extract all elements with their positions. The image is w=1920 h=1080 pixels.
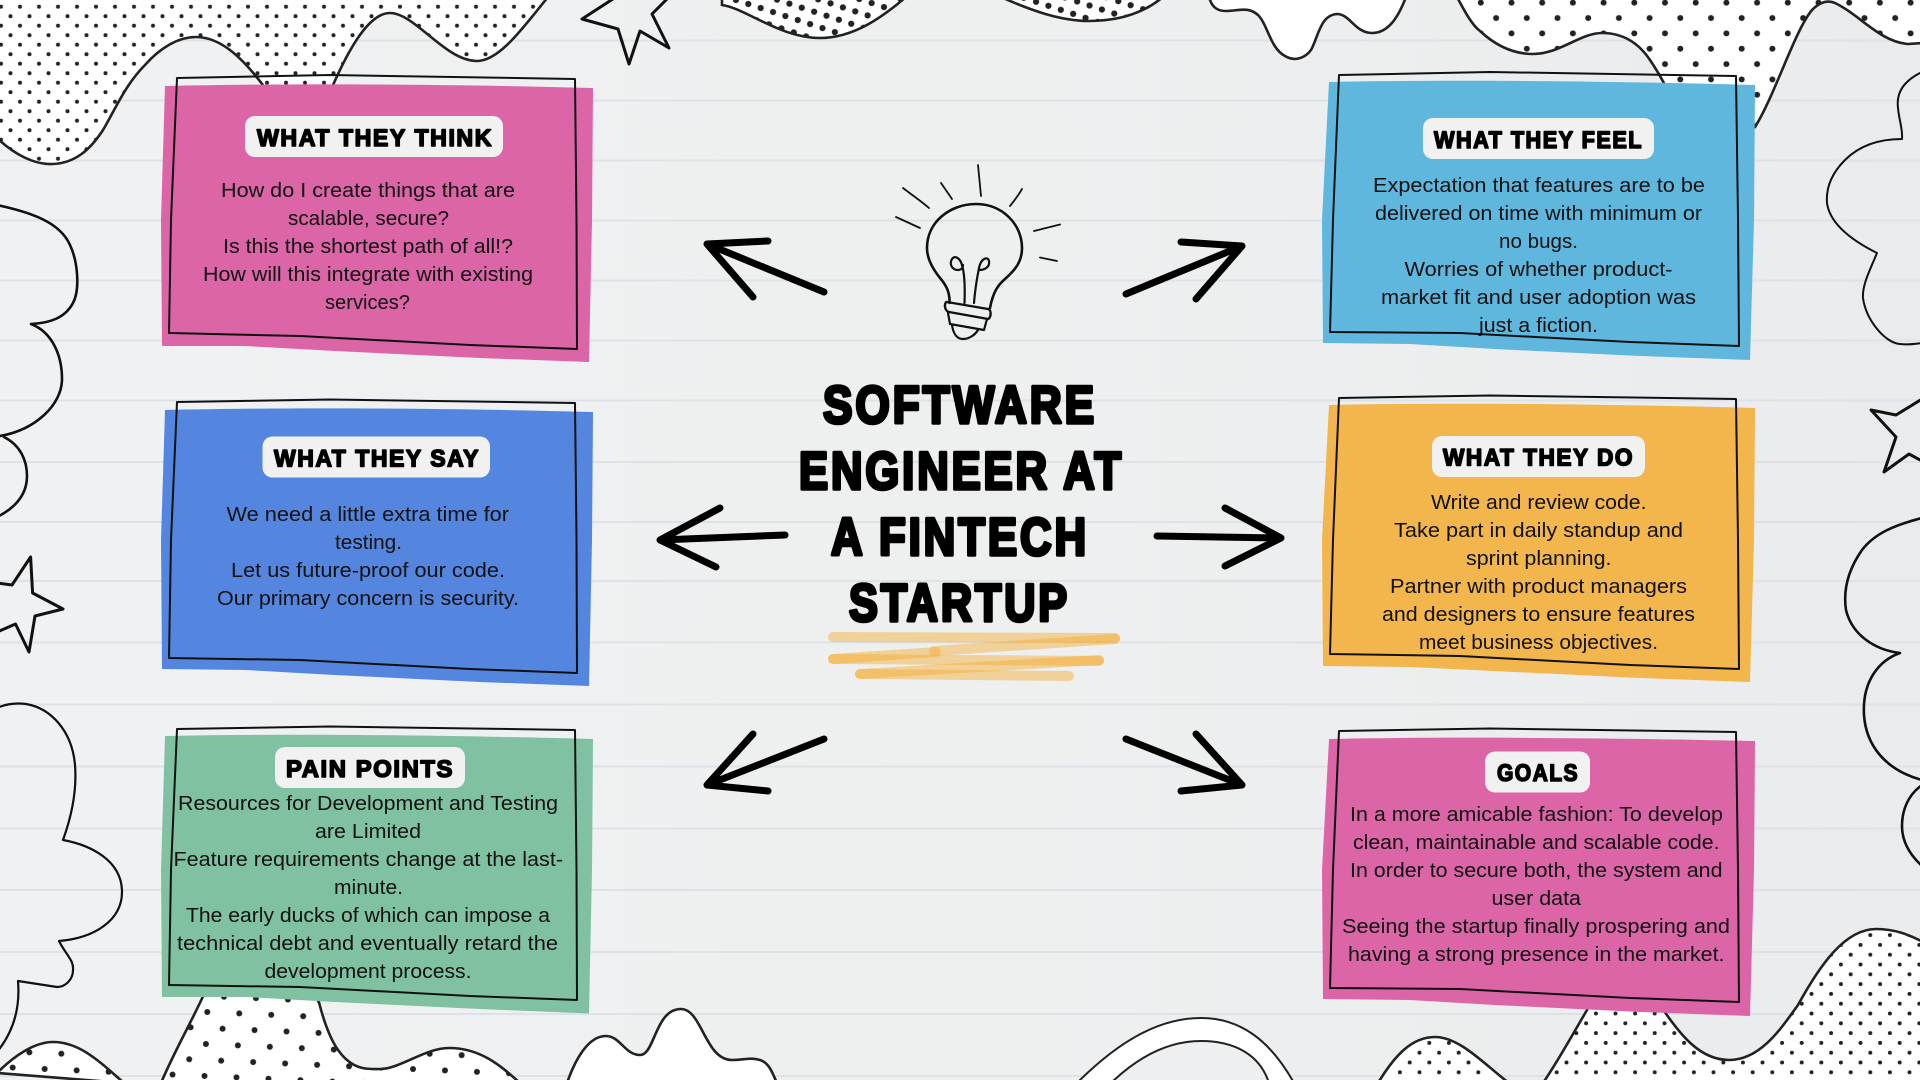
sketch frame [169,75,577,349]
sketch frame [169,400,577,673]
panel: what they do [1322,396,1755,682]
decoration: top middle dotted blob [722,0,906,38]
body text: clean, maintainable and scalable code. [1353,831,1720,854]
body text: In a more amicable fashion: To develop [1350,803,1723,826]
decoration: top white blob [1209,0,1406,59]
body text: having a strong presence in the market. [1348,943,1724,966]
sketch frame [1330,72,1739,346]
body text: Resources for Development and Testing [178,792,558,815]
arrow: to what they think [707,241,824,297]
panel: what they feel [1322,72,1755,360]
decoration: right star [1871,399,1920,472]
body text: Let us future-proof our code. [231,559,505,582]
title: A FINTECH [831,508,1089,567]
body text: and designers to ensure features [1382,603,1695,626]
decoration: bottom-left dotted blob [0,1042,124,1080]
decoration: bottom white blob [567,1009,777,1080]
title: SOFTWARE [823,376,1097,435]
heading: WHAT THEY DO [1443,444,1634,472]
sketch frame [1330,396,1739,669]
body text: user data [1492,887,1582,910]
panel: pain points [161,726,593,1014]
body text [1382,491,1695,654]
body text [203,179,533,314]
heading: WHAT THEY SAY [274,446,480,472]
arrow: to what they say [660,508,785,567]
body text: development process. [264,960,472,983]
body text [174,792,563,983]
decoration: top centre dotted blob [1001,0,1163,21]
body text [1373,174,1705,337]
body text: market fit and user adoption was [1381,286,1696,309]
panel: goals [1322,728,1755,1016]
body text: The early ducks of which can impose a [186,904,551,927]
heading pill [275,747,465,788]
decoration: right small cloud outline [1902,785,1920,866]
body text: Worries of whether product- [1404,258,1672,281]
body text: Our primary concern is security. [217,587,519,610]
decoration: bottom-left tall dotted blob [161,990,520,1080]
body text: meet business objectives. [1419,631,1658,654]
body text: no bugs. [1499,230,1578,253]
title [799,376,1124,633]
body text: are Limited [315,820,421,843]
heading: GOALS [1497,760,1579,787]
body text: In order to secure both, the system and [1350,859,1722,882]
decoration: top-left dotted blob [0,0,548,164]
arrow: to pain points [707,734,824,791]
decoration: left cloud outline [0,205,77,436]
heading pill [1485,752,1590,792]
body text: minute. [334,876,403,899]
decoration: right cloud outline [1827,72,1920,344]
body text: Seeing the startup finally prospering and [1342,915,1730,938]
body text: We need a little extra time for [226,503,509,526]
body text: How will this integrate with existing [203,263,533,286]
decoration: left lower cloud outline [0,703,122,1052]
arrow: to what they do [1157,508,1281,566]
card fill [161,735,593,1014]
title highlight scribble [833,637,1115,676]
card fill [161,408,593,686]
body text: sprint planning. [1466,547,1612,570]
decoration: top star [582,0,669,64]
body text: Feature requirements change at the last- [174,848,563,871]
card fill [1322,404,1755,682]
decoration: bottom-right small dotted blob [1378,1037,1509,1080]
decoration: bottom ring [1077,1018,1294,1080]
card fill [1322,81,1755,360]
heading pill [262,436,490,478]
body text: Expectation that features are to be [1373,174,1705,197]
arrow: to goals [1126,734,1242,791]
decoration: left star [0,557,63,652]
body text: technical debt and eventually retard the [177,932,558,955]
arrow: to what they feel [1126,242,1242,299]
decoration: top-right dotted blob [1457,0,1920,127]
card fill [1322,738,1755,1016]
sketch frame [169,726,577,1000]
panel: what they think [161,75,593,362]
icon: light bulb [896,165,1060,339]
heading pill [245,116,503,157]
sketch frame [1330,728,1739,1002]
body text [217,503,519,610]
body text: Partner with product managers [1390,575,1687,598]
title: STARTUP [849,574,1070,633]
decoration: right lower cloud outline [1845,518,1920,780]
body text: services? [325,291,410,314]
body text: How do I create things that are [221,179,515,202]
body text: just a fiction. [1478,314,1598,337]
decoration: left small cloud outline [0,437,27,517]
heading pill [1432,436,1645,477]
body text: delivered on time with minimum or [1375,202,1702,225]
body text: scalable, secure? [288,207,449,230]
body text: testing. [335,531,402,554]
body text: Write and review code. [1431,491,1646,514]
heading pill [1423,118,1654,159]
title: ENGINEER AT [799,442,1124,501]
body text: Take part in daily standup and [1394,519,1683,542]
card fill [161,84,593,362]
body text: Is this the shortest path of all!? [223,235,513,258]
body text [1342,803,1730,966]
panel: what they say [161,400,593,686]
heading: PAIN POINTS [286,756,454,783]
heading: WHAT THEY FEEL [1434,127,1643,154]
decoration: bottom-right dotted blob [1543,929,1920,1080]
heading: WHAT THEY THINK [257,125,493,152]
